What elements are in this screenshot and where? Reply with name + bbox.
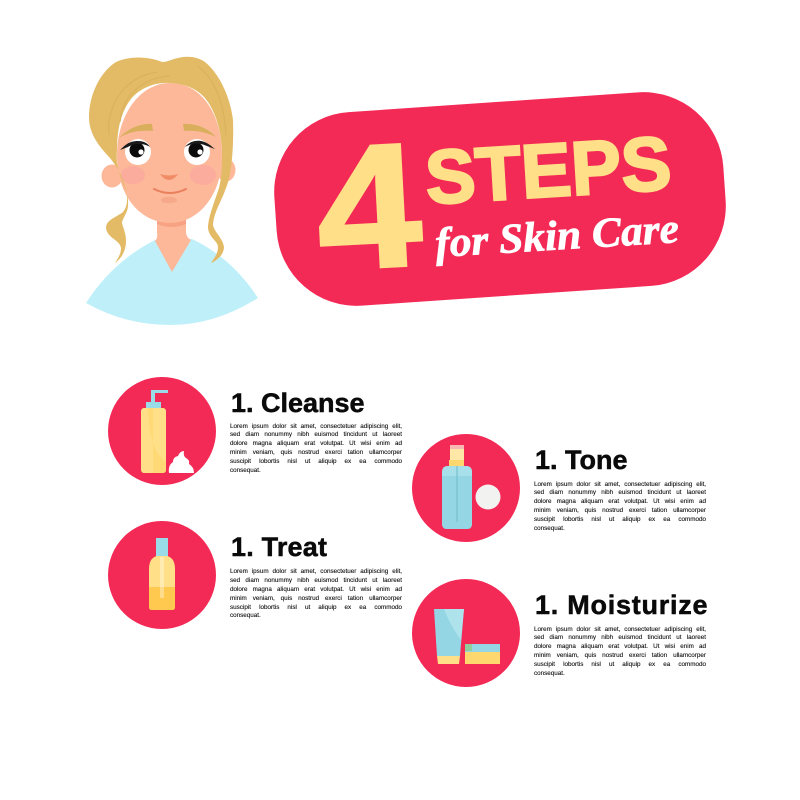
face [117,83,222,223]
body text: Lorem ipsum dolor sit amet, consectetuer adipiscing elit, [534,626,706,632]
body text: suscipit lobortis nisl ut aliquip ex ea commodo [534,661,706,668]
body text: minim veniam, quis nostrud exerci tation ullamcorper [534,507,706,514]
right eye [184,139,215,165]
body text: sed diam nonummy nibh euismod tincidunt ut laoreet [534,634,706,641]
body text: sed diam nonummy nibh euismod tincidunt ut laoreet [230,431,402,438]
icon: cream tube and jar [412,579,520,687]
hair [89,57,233,263]
body text: minim veniam, quis nostrud exerci tation ullamcorper [230,595,402,602]
body text [534,480,706,532]
hair strands [109,66,226,135]
body text: dolore magna aliquam erat volutpat. Ut wisi enim ad [230,440,402,447]
body text: consequat. [534,670,565,677]
body text: Lorem ipsum dolor sit amet, consectetuer adipiscing elit, [230,422,402,430]
body text [230,422,402,474]
shirt [86,239,258,325]
body text: suscipit lobortis nisl ut aliquip ex ea commodo [230,458,402,465]
heading: 1. Cleanse [231,388,365,418]
banner shape [269,87,731,311]
right ear [216,158,236,182]
body text: Lorem ipsum dolor sit amet, consectetuer adipiscing elit, [534,480,706,488]
subtitle: for Skin Care [434,206,680,267]
icon: serum bottle [108,521,216,629]
right eyebrow [183,124,216,137]
body text [230,568,402,619]
body text: minim veniam, quis nostrud exerci tation ullamcorper [534,652,706,659]
body text: consequat. [230,467,261,474]
left blush [121,166,145,184]
body text: sed diam nonummy nibh euismod tincidunt ut laoreet [230,577,402,584]
body text: sed diam nonummy nibh euismod tincidunt ut laoreet [534,489,706,496]
left ear [102,164,122,188]
heading: 1. Moisturize [535,590,708,620]
neck shadow [157,219,186,227]
body text: dolore magna aliquam erat volutpat. Ut wisi enim ad [534,498,706,505]
heading: 1. Tone [535,445,628,475]
body text: dolore magna aliquam erat volutpat. Ut wisi enim ad [230,586,402,593]
body text: consequat. [230,612,261,619]
body text: suscipit lobortis nisl ut aliquip ex ea commodo [230,604,402,611]
left eye [120,139,151,165]
icon: toner bottle and cotton pad [412,434,520,542]
lower lip shadow [161,197,177,203]
neck [155,215,191,272]
right blush [190,165,216,185]
body text: suscipit lobortis nisl ut aliquip ex ea commodo [534,516,706,523]
step: treat [108,521,402,629]
nose [160,174,178,180]
left eyebrow [119,124,153,138]
heading: 1. Treat [231,532,327,562]
body text: dolore magna aliquam erat volutpat. Ut wisi enim ad [534,643,706,650]
step: tone [412,434,706,542]
mouth [154,189,186,193]
icon: pump bottle and foam [108,377,216,485]
body text: consequat. [534,525,565,532]
body text: Lorem ipsum dolor sit amet, consectetuer adipiscing elit, [230,568,402,575]
body text [534,626,706,677]
body text: minim veniam, quis nostrud exerci tation ullamcorper [230,449,402,456]
step: cleanse [108,377,402,485]
title banner [274,92,726,308]
illustration: woman's portrait [86,56,258,325]
big number 4: 4 [312,107,426,308]
STEPS heading: STEPS [423,121,674,221]
step: moisturize [412,579,708,687]
